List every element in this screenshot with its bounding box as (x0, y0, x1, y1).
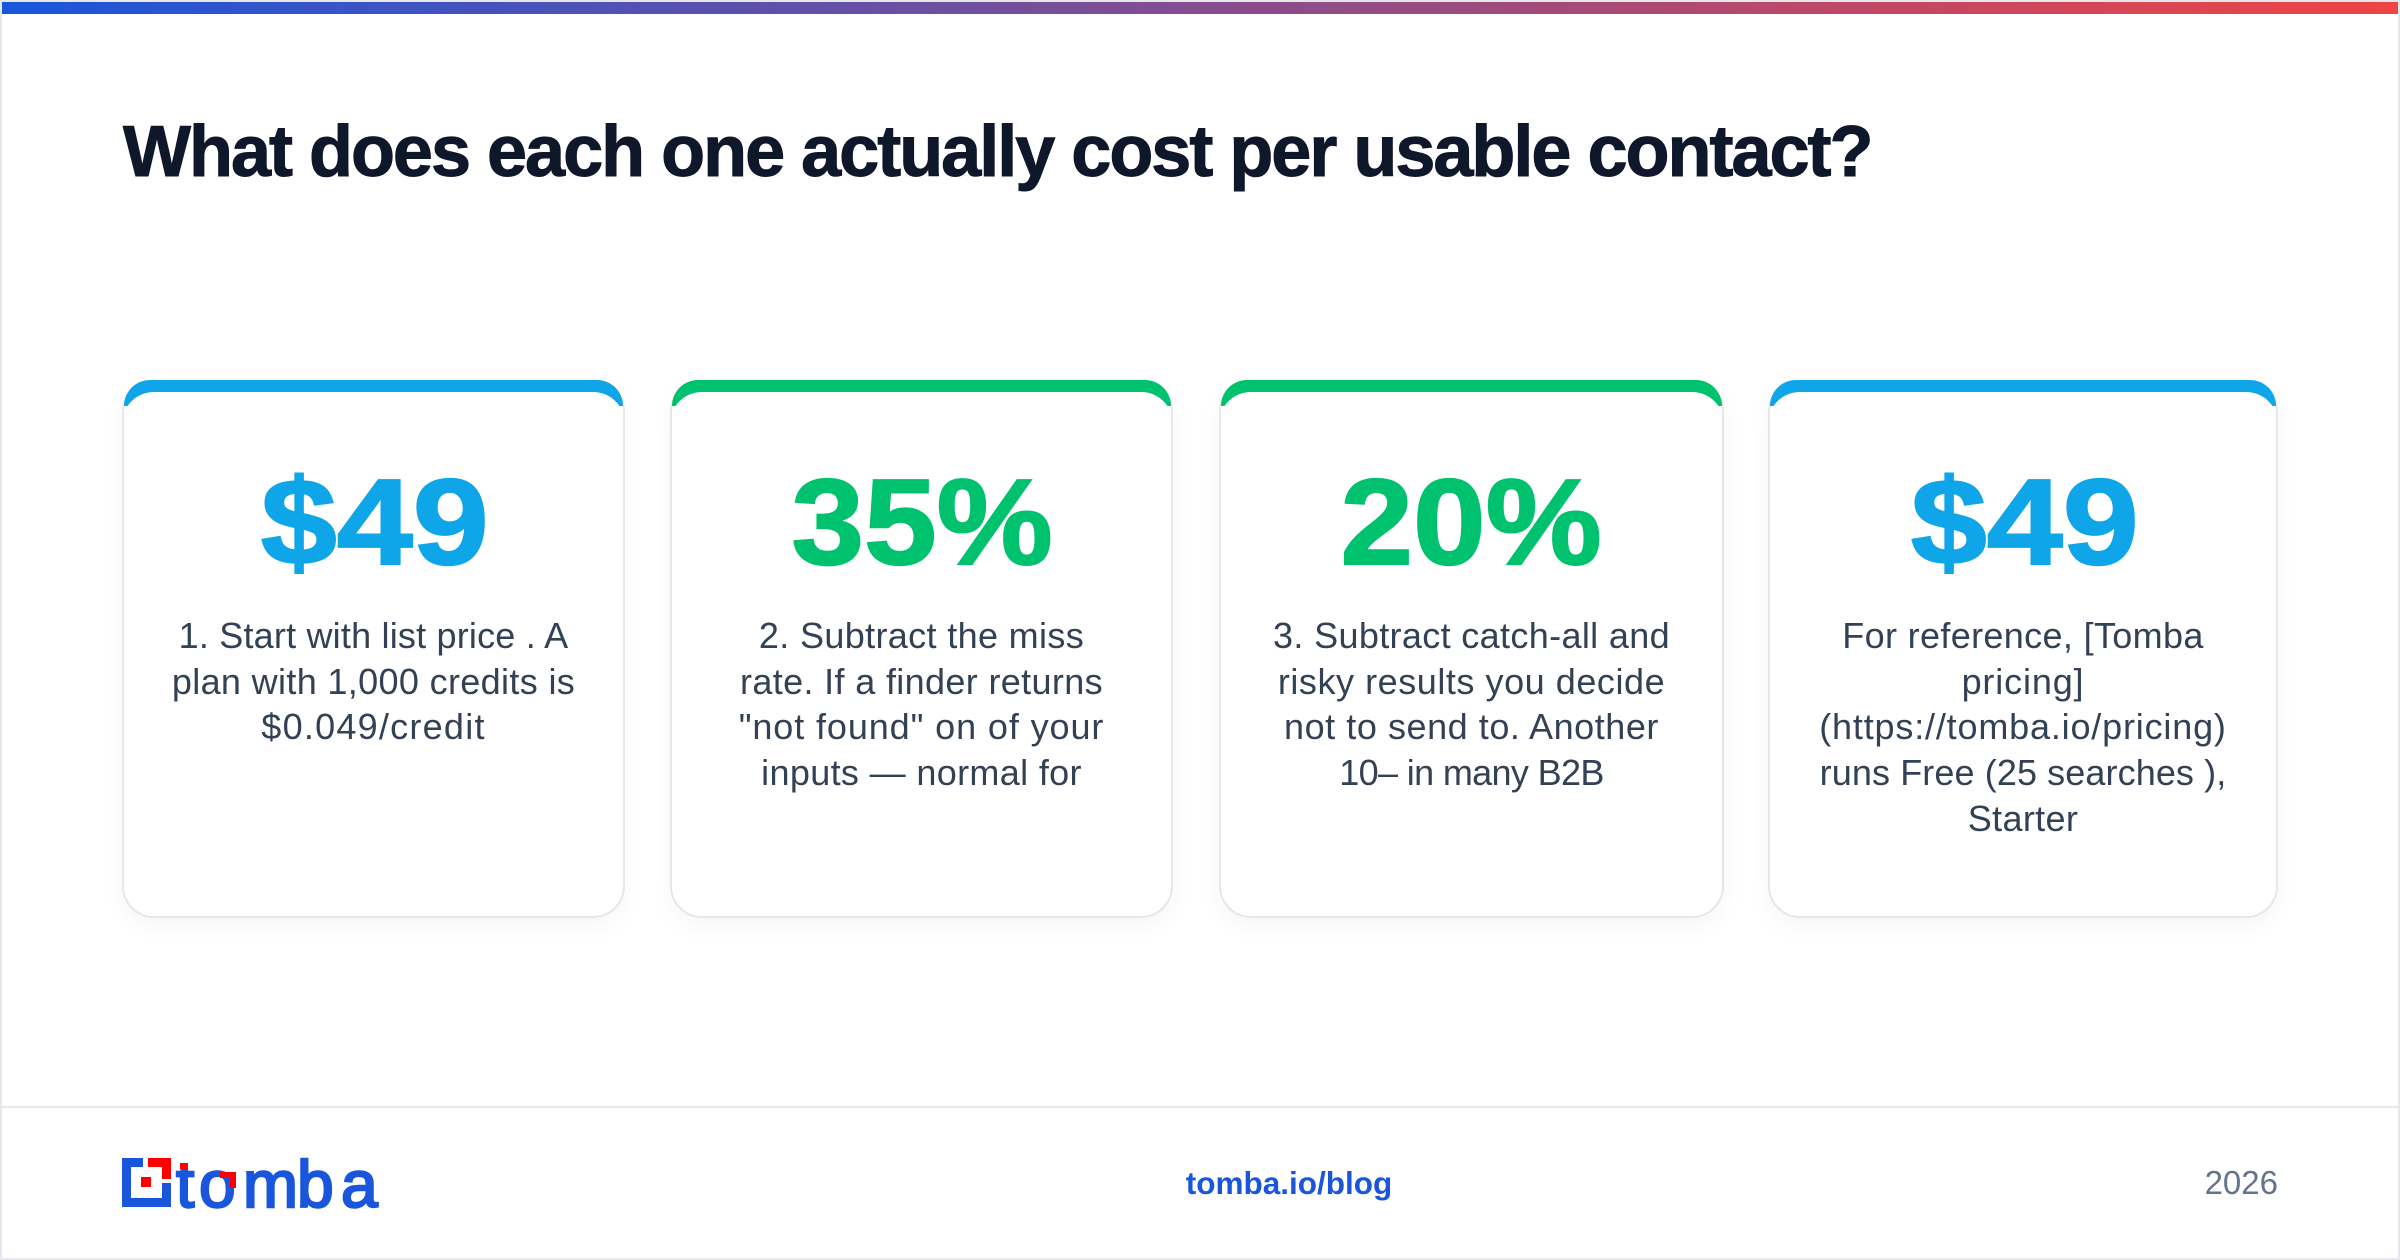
panel: step 1 list price (122, 380, 625, 918)
panel: step 2 miss rate (670, 380, 1173, 918)
text: list price: $0.049/credit (261, 706, 486, 747)
top gradient bar (2, 2, 2398, 14)
text: Tomba pricing: pricing] (1962, 661, 2084, 702)
text: miss rate: rate. If a finder returns (740, 661, 1103, 702)
text: Tomba pricing: runs Free (25 searches ), (1820, 752, 2226, 793)
footer divider (2, 1106, 2398, 1108)
text: Tomba pricing: (https://tomba.io/pricing) (1819, 706, 2227, 747)
stat: $49: $49 (1911, 454, 2138, 590)
stat: 35%: 35% (792, 454, 1053, 590)
logo: tomba: tomba (176, 1147, 378, 1221)
text: list price (172, 615, 575, 747)
footer link: tomba.io/blog (1186, 1165, 1392, 1201)
text: catch-all (1273, 615, 1670, 793)
title: What does each one actually cost per usable contact? (123, 112, 1872, 192)
text: Tomba pricing: For reference, [Tomba (1842, 615, 2204, 656)
text: list price: 1. Start with list price . A (179, 615, 568, 656)
panel: Tomba pricing reference (1768, 380, 2278, 918)
footer year: 2026 (2205, 1164, 2278, 1201)
text: miss rate (739, 615, 1104, 793)
text: miss rate: inputs — normal for (761, 752, 1082, 793)
text: Tomba pricing: Starter (1968, 798, 2078, 839)
stat: $49: $49 (261, 454, 489, 590)
text: catch-all: 10– in many B2B (1339, 752, 1604, 793)
text: Tomba pricing (1819, 615, 2227, 839)
text: catch-all: 3. Subtract catch-all and (1273, 615, 1670, 656)
text: miss rate: 2. Subtract the miss (759, 615, 1084, 656)
text: catch-all: not to send to. Another (1284, 706, 1659, 747)
text: list price: plan with 1,000 credits is (172, 661, 575, 702)
text: miss rate: "not found" on of your (739, 706, 1104, 747)
stat: 20%: 20% (1341, 454, 1602, 590)
text: catch-all: risky results you decide (1278, 661, 1665, 702)
panel: step 3 catch-all (1219, 380, 1724, 918)
